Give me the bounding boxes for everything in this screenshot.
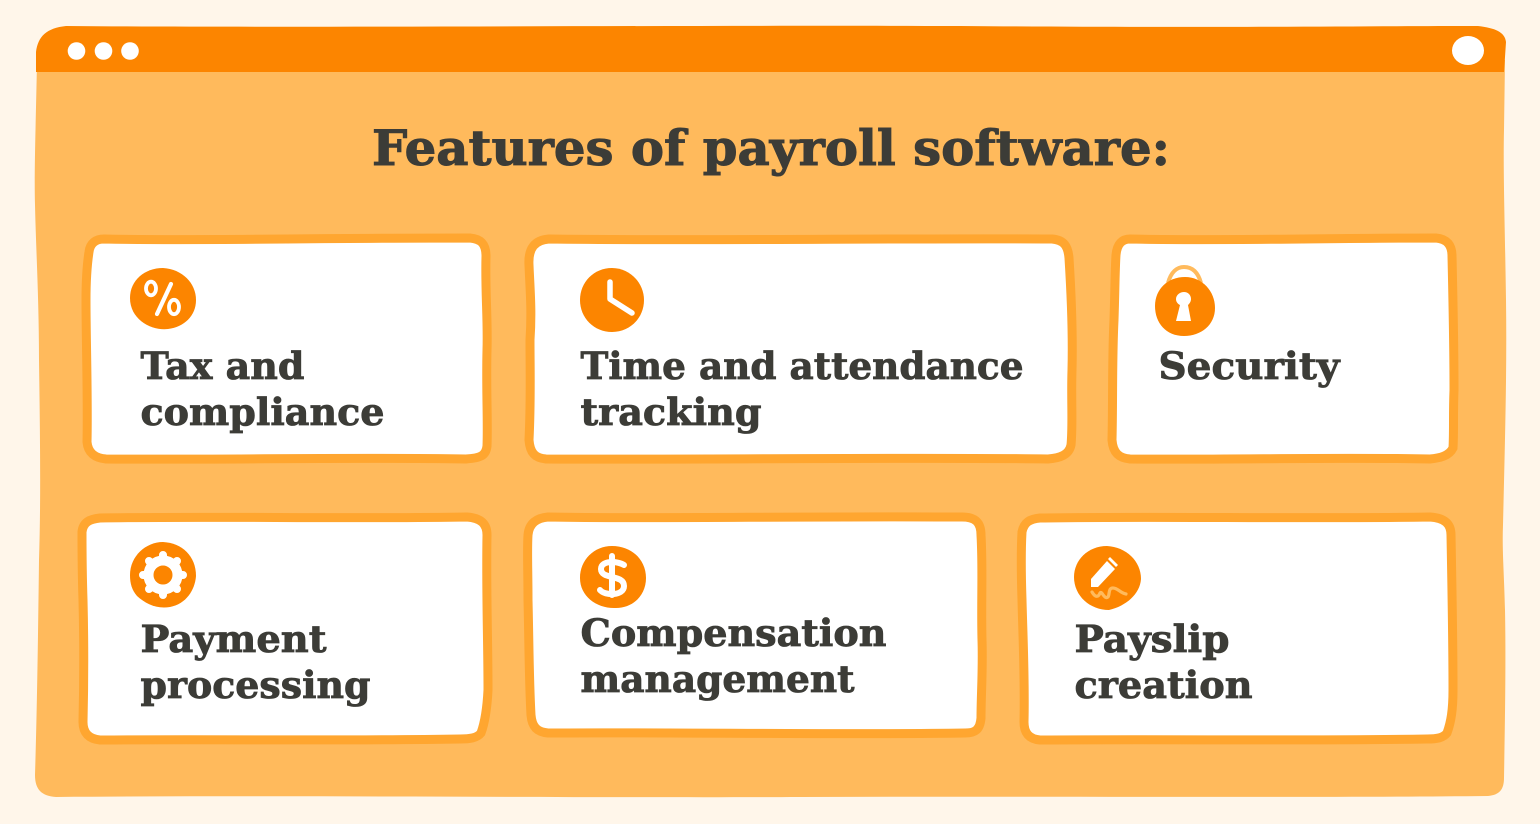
window title bar (36, 26, 1506, 72)
text: payment processing: Payment (140, 617, 327, 661)
panel: time and attendance tracking: tracking (580, 390, 762, 434)
panel: payment processing (82, 517, 488, 740)
icon: dollar (580, 546, 646, 608)
panel: time and attendance tracking (529, 239, 1072, 459)
panel: payslip creation: creation (1074, 663, 1252, 707)
panel: payslip creation (1021, 517, 1453, 740)
window round button (1452, 36, 1484, 65)
panel: payment processing: processing (140, 663, 370, 707)
text: compensation management: Compensation (580, 611, 886, 655)
icon: pencil (1074, 546, 1141, 610)
text: security: Security (1158, 344, 1341, 388)
title: Features of payroll software: (372, 119, 1170, 177)
icon: gear (130, 542, 196, 607)
panel: security (1112, 238, 1454, 459)
panel: compensation management: management (580, 657, 855, 701)
panel: compensation management (528, 517, 982, 734)
icon: padlock (1155, 267, 1215, 336)
text: tax and compliance: Tax and (140, 344, 304, 388)
panel: tax and compliance: compliance (140, 390, 384, 434)
text: payslip creation: Payslip (1074, 617, 1230, 661)
icon: clock (580, 268, 644, 332)
window control dots (68, 42, 139, 60)
text: time and attendance tracking: Time and attendance (580, 344, 1024, 388)
panel: tax and compliance (86, 238, 487, 459)
icon: percent (130, 268, 196, 329)
